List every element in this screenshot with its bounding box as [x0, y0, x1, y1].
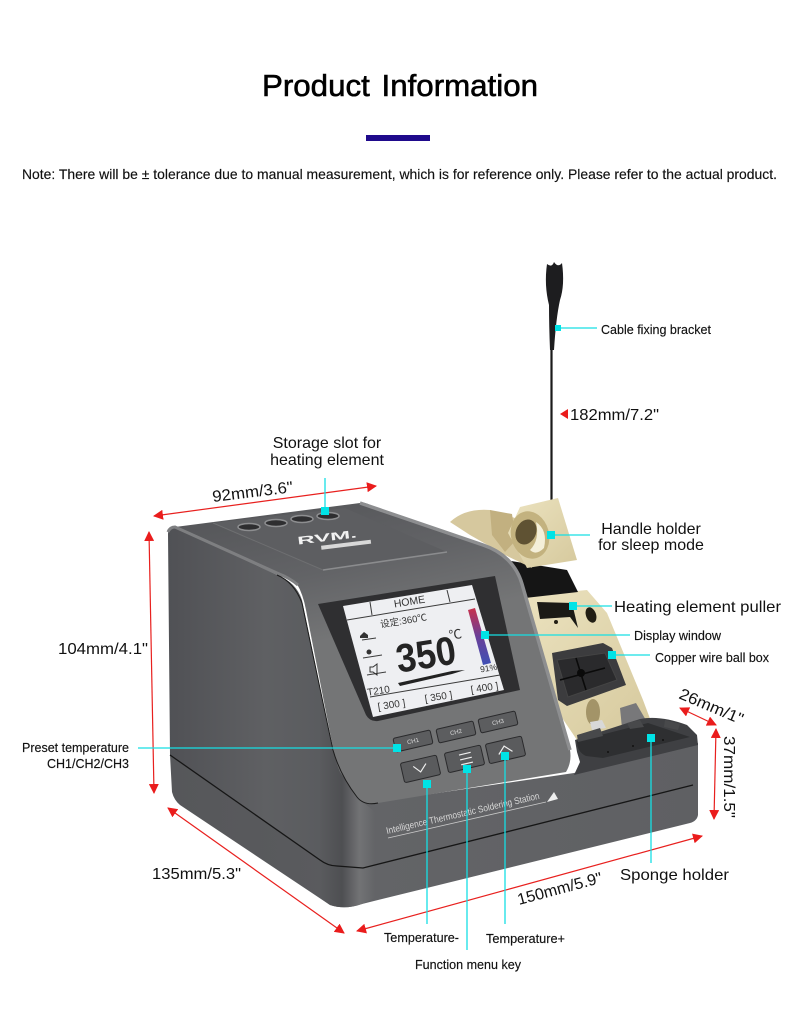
callout: handle holder: for sleep mode	[598, 537, 704, 554]
top and front surface	[175, 503, 570, 804]
copper wire ball box	[552, 643, 626, 706]
callout: function menu key	[415, 765, 521, 972]
brand logo	[297, 527, 371, 553]
title accent bar	[366, 135, 430, 141]
callout: copper wire ball box: Copper wire ball box	[655, 650, 769, 665]
dimension: depth 135mm	[152, 808, 344, 933]
callout: copper wire ball box	[608, 650, 769, 665]
callout: temperature minus: Temperature-	[384, 930, 459, 945]
dimension: cable 182mm: 182mm/7.2"	[570, 407, 659, 424]
cable fixing bracket	[546, 262, 563, 500]
screen readings: 350	[393, 629, 459, 682]
dimension: length 150mm	[357, 836, 702, 931]
callout: display window: Display window	[634, 628, 722, 643]
callout: preset temperature	[22, 740, 401, 771]
display screen	[343, 585, 504, 717]
callout: temperature minus	[384, 780, 459, 945]
screen readings: [ 300 ]	[377, 698, 406, 713]
display bezel	[318, 576, 520, 721]
callout: function menu key: Function menu key	[415, 957, 521, 972]
soldering station body	[168, 503, 698, 907]
screen readings: 91%	[479, 662, 498, 674]
handle holder	[450, 510, 532, 568]
base	[170, 743, 698, 907]
storage slots	[238, 512, 339, 530]
rear tower and holders	[450, 498, 652, 740]
callout: preset temperature: Preset temperature	[22, 740, 129, 755]
dimension: depth 135mm: 135mm/5.3"	[152, 866, 241, 883]
dimension: height 104mm	[58, 532, 154, 793]
seam line	[170, 755, 693, 868]
title: Product Information	[262, 68, 538, 103]
callout: storage slot: heating element	[270, 452, 384, 469]
side face	[168, 527, 345, 866]
callout: handle holder	[547, 521, 704, 554]
callout: storage slot	[270, 435, 384, 515]
sponge holder	[574, 718, 698, 775]
heating element puller tower	[515, 590, 652, 740]
temperature bar	[468, 608, 491, 665]
callout: preset temperature: CH1/CH2/CH3	[47, 756, 129, 771]
callout: sponge holder: Sponge holder	[620, 867, 730, 884]
buttons	[393, 711, 526, 783]
callout: temperature plus: Temperature+	[486, 931, 565, 946]
dimension: width 92mm	[154, 479, 376, 516]
screen readings: [ 350 ]	[424, 690, 453, 705]
screen readings: 设定:360℃	[379, 611, 428, 631]
brand logo: RVM.	[297, 528, 358, 548]
base corner	[320, 690, 375, 907]
callout: display window	[481, 628, 722, 643]
callout: cable fixing bracket: Cable fixing bracket	[601, 322, 711, 337]
note text: Note: There will be ± tolerance due to manual measurement, which is for reference only. Please refer to the actual product.	[22, 166, 777, 182]
callout: cable fixing bracket	[555, 322, 711, 337]
callout: temperature plus	[486, 752, 565, 946]
dimension: width 92mm: 92mm/3.6"	[211, 479, 294, 506]
dimension: sponge 37mm	[714, 729, 737, 819]
buttons: CH2	[450, 729, 463, 737]
base printed name: Intelligence Thermostatic Soldering Station	[385, 791, 541, 837]
callout: handle holder: Handle holder	[601, 521, 701, 538]
screen readings	[366, 594, 499, 713]
callout: heating element puller: Heating element puller	[614, 599, 782, 616]
top plate	[213, 508, 447, 570]
buttons: CH1	[407, 738, 420, 746]
dimension: length 150mm: 150mm/5.9"	[516, 870, 604, 909]
buttons: CH3	[492, 719, 505, 727]
dimension: height 104mm: 104mm/4.1"	[58, 641, 148, 658]
dimension: sponge 26mm: 26mm/1"	[676, 686, 746, 728]
screen readings: T210	[366, 684, 391, 699]
dimension: sponge 37mm: 37mm/1.5"	[720, 736, 737, 818]
callout: sponge holder	[620, 734, 730, 884]
screen readings: ℃	[448, 626, 463, 643]
callout: storage slot: Storage slot for	[273, 435, 382, 452]
screen readings: HOME	[393, 594, 426, 610]
screen readings: [ 400 ]	[470, 681, 499, 696]
